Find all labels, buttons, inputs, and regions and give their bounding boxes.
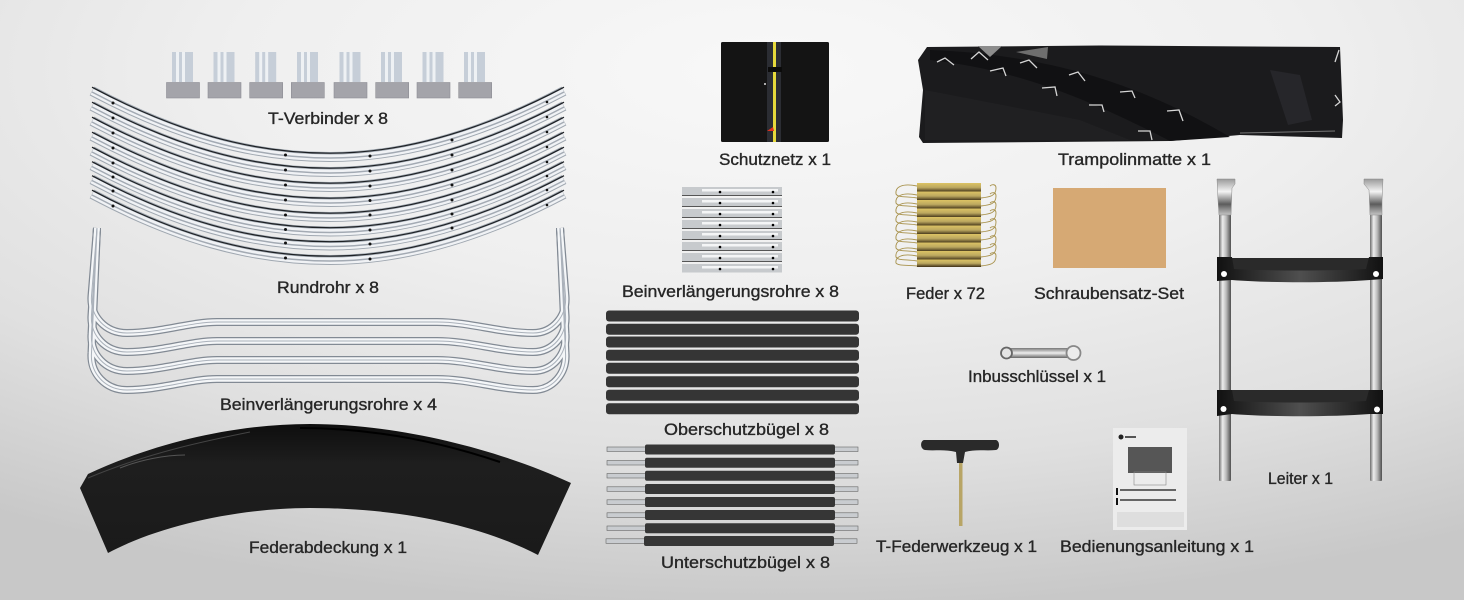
item: Leiter ladder (1217, 179, 1383, 481)
label: T-Verbinder: T-Verbinder x 8 (268, 110, 388, 128)
item: T-Verbinder connectors (166, 52, 492, 98)
ladder hooks (1217, 179, 1383, 215)
item: Unterschutzbügel foam tubes with rods (606, 444, 858, 546)
upper step (1217, 257, 1383, 282)
lower step (1217, 390, 1383, 416)
item: Schraubensatz cardboard box (1053, 188, 1166, 268)
item: Schutznetz safety net (721, 42, 829, 142)
label: Beinverlängerungsrohre x 4: Beinverlängerungsrohre x 4 (220, 396, 437, 414)
label: Schraubensatz-Set: Schraubensatz-Set (1034, 285, 1184, 303)
item: Federabdeckung spring cover (80, 424, 571, 555)
label: Inbusschlüssel: Inbusschlüssel x 1 (968, 368, 1106, 386)
label: Unterschutzbügel: Unterschutzbügel x 8 (661, 554, 830, 572)
label: Bedienungsanleitung: Bedienungsanleitung x 1 (1060, 538, 1254, 556)
label: Oberschutzbügel: Oberschutzbügel x 8 (664, 421, 829, 439)
item: T-Federwerkzeug T-handle tool (921, 440, 999, 526)
item: Inbusschlüssel wrench (1001, 346, 1080, 360)
item: Oberschutzbügel foam tubes (606, 310, 859, 414)
ladder poles (1219, 205, 1382, 481)
label: Feder: Feder x 72 (906, 285, 985, 303)
label: Federabdeckung: Federabdeckung x 1 (249, 539, 407, 557)
item: Feder springs (896, 183, 996, 267)
item: Trampolinmatte mat (918, 46, 1343, 143)
item: Bedienungsanleitung manual (1113, 428, 1187, 530)
item: Rundrohr curved tubes (92, 87, 564, 261)
label: Trampolinmatte: Trampolinmatte x 1 (1058, 151, 1211, 169)
label: T-Federwerkzeug: T-Federwerkzeug x 1 (876, 538, 1037, 556)
tube holes (112, 101, 548, 260)
item: Beinverlängerungsrohre short tubes (682, 187, 782, 272)
item: Beinverlängerungsrohre U-shaped tubes (91, 228, 566, 390)
label: Beinverlängerungsrohre x 8: Beinverlängerungsrohre x 8 (622, 283, 839, 301)
label: Rundrohr: Rundrohr x 8 (277, 279, 379, 297)
label: Schutznetz: Schutznetz x 1 (719, 151, 831, 169)
label: Leiter: Leiter x 1 (1268, 470, 1333, 488)
